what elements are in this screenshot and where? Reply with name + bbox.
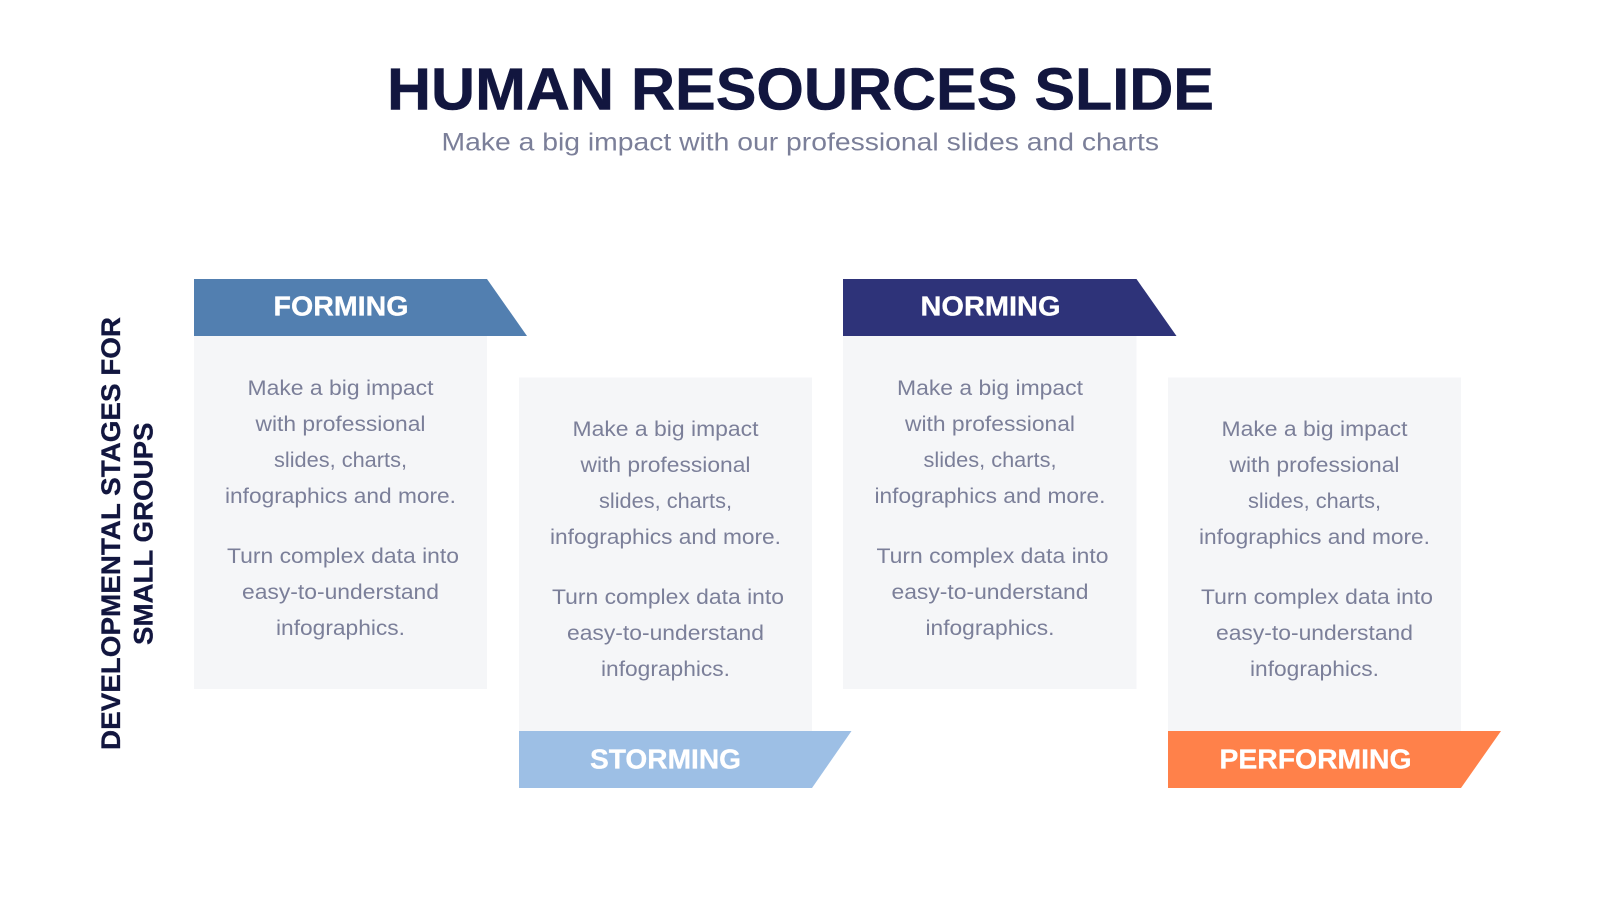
text: norming: with professional <box>904 413 1075 436</box>
text: storming: Turn complex data into <box>552 586 784 609</box>
text: storming: easy-to-understand <box>567 622 764 645</box>
banner: performing: PERFORMING <box>1220 744 1412 774</box>
text: performing: easy-to-understand <box>1216 622 1413 645</box>
text: performing: Make a big impact <box>1222 418 1408 441</box>
text: norming: Turn complex data into <box>876 545 1108 568</box>
banner: performing <box>1168 731 1501 788</box>
text: forming: slides, charts, <box>274 449 407 472</box>
panel: storming <box>519 378 852 788</box>
text: norming: infographics. <box>926 617 1054 640</box>
vertical label <box>96 317 158 750</box>
text: norming: Make a big impact <box>897 377 1083 400</box>
banner: norming <box>843 279 1176 336</box>
text: forming: with professional <box>254 413 426 436</box>
panel: performing <box>1168 378 1501 788</box>
text: storming: infographics. <box>601 658 730 681</box>
text: performing: infographics. <box>1250 658 1379 681</box>
text: norming: easy-to-understand <box>892 581 1088 604</box>
text: forming: easy-to-understand <box>242 581 439 604</box>
vertical label: DEVELOPMENTAL STAGES FOR <box>96 317 126 750</box>
panel: forming <box>194 279 527 689</box>
text: norming <box>874 377 1108 640</box>
banner: norming: NORMING <box>920 290 1060 322</box>
text: performing: Turn complex data into <box>1201 586 1433 609</box>
banner: forming <box>194 279 527 336</box>
vertical label: SMALL GROUPS <box>128 422 158 645</box>
text: storming: slides, charts, <box>599 490 732 513</box>
text: performing <box>1199 418 1433 681</box>
text: norming: slides, charts, <box>924 449 1056 472</box>
text: forming: Turn complex data into <box>227 545 459 568</box>
text: performing: infographics and more. <box>1199 526 1430 549</box>
banner: storming: STORMING <box>590 744 741 774</box>
subtitle: Make a big impact with our professional slides and charts <box>442 128 1159 156</box>
text: performing: with professional <box>1228 454 1400 477</box>
text: forming <box>225 377 459 640</box>
text: forming: infographics. <box>276 617 405 640</box>
text: storming <box>550 418 784 681</box>
text: storming: infographics and more. <box>550 526 781 549</box>
text: norming: infographics and more. <box>874 485 1106 508</box>
text: storming: with professional <box>579 454 750 477</box>
title: HUMAN RESOURCES SLIDE <box>387 56 1214 122</box>
banner: storming <box>519 731 852 788</box>
panel: norming <box>843 279 1176 689</box>
text: storming: Make a big impact <box>572 418 759 441</box>
text: forming: Make a big impact <box>248 377 434 400</box>
text: forming: infographics and more. <box>225 485 456 508</box>
banner: forming: FORMING <box>274 290 408 322</box>
text: performing: slides, charts, <box>1248 490 1381 513</box>
